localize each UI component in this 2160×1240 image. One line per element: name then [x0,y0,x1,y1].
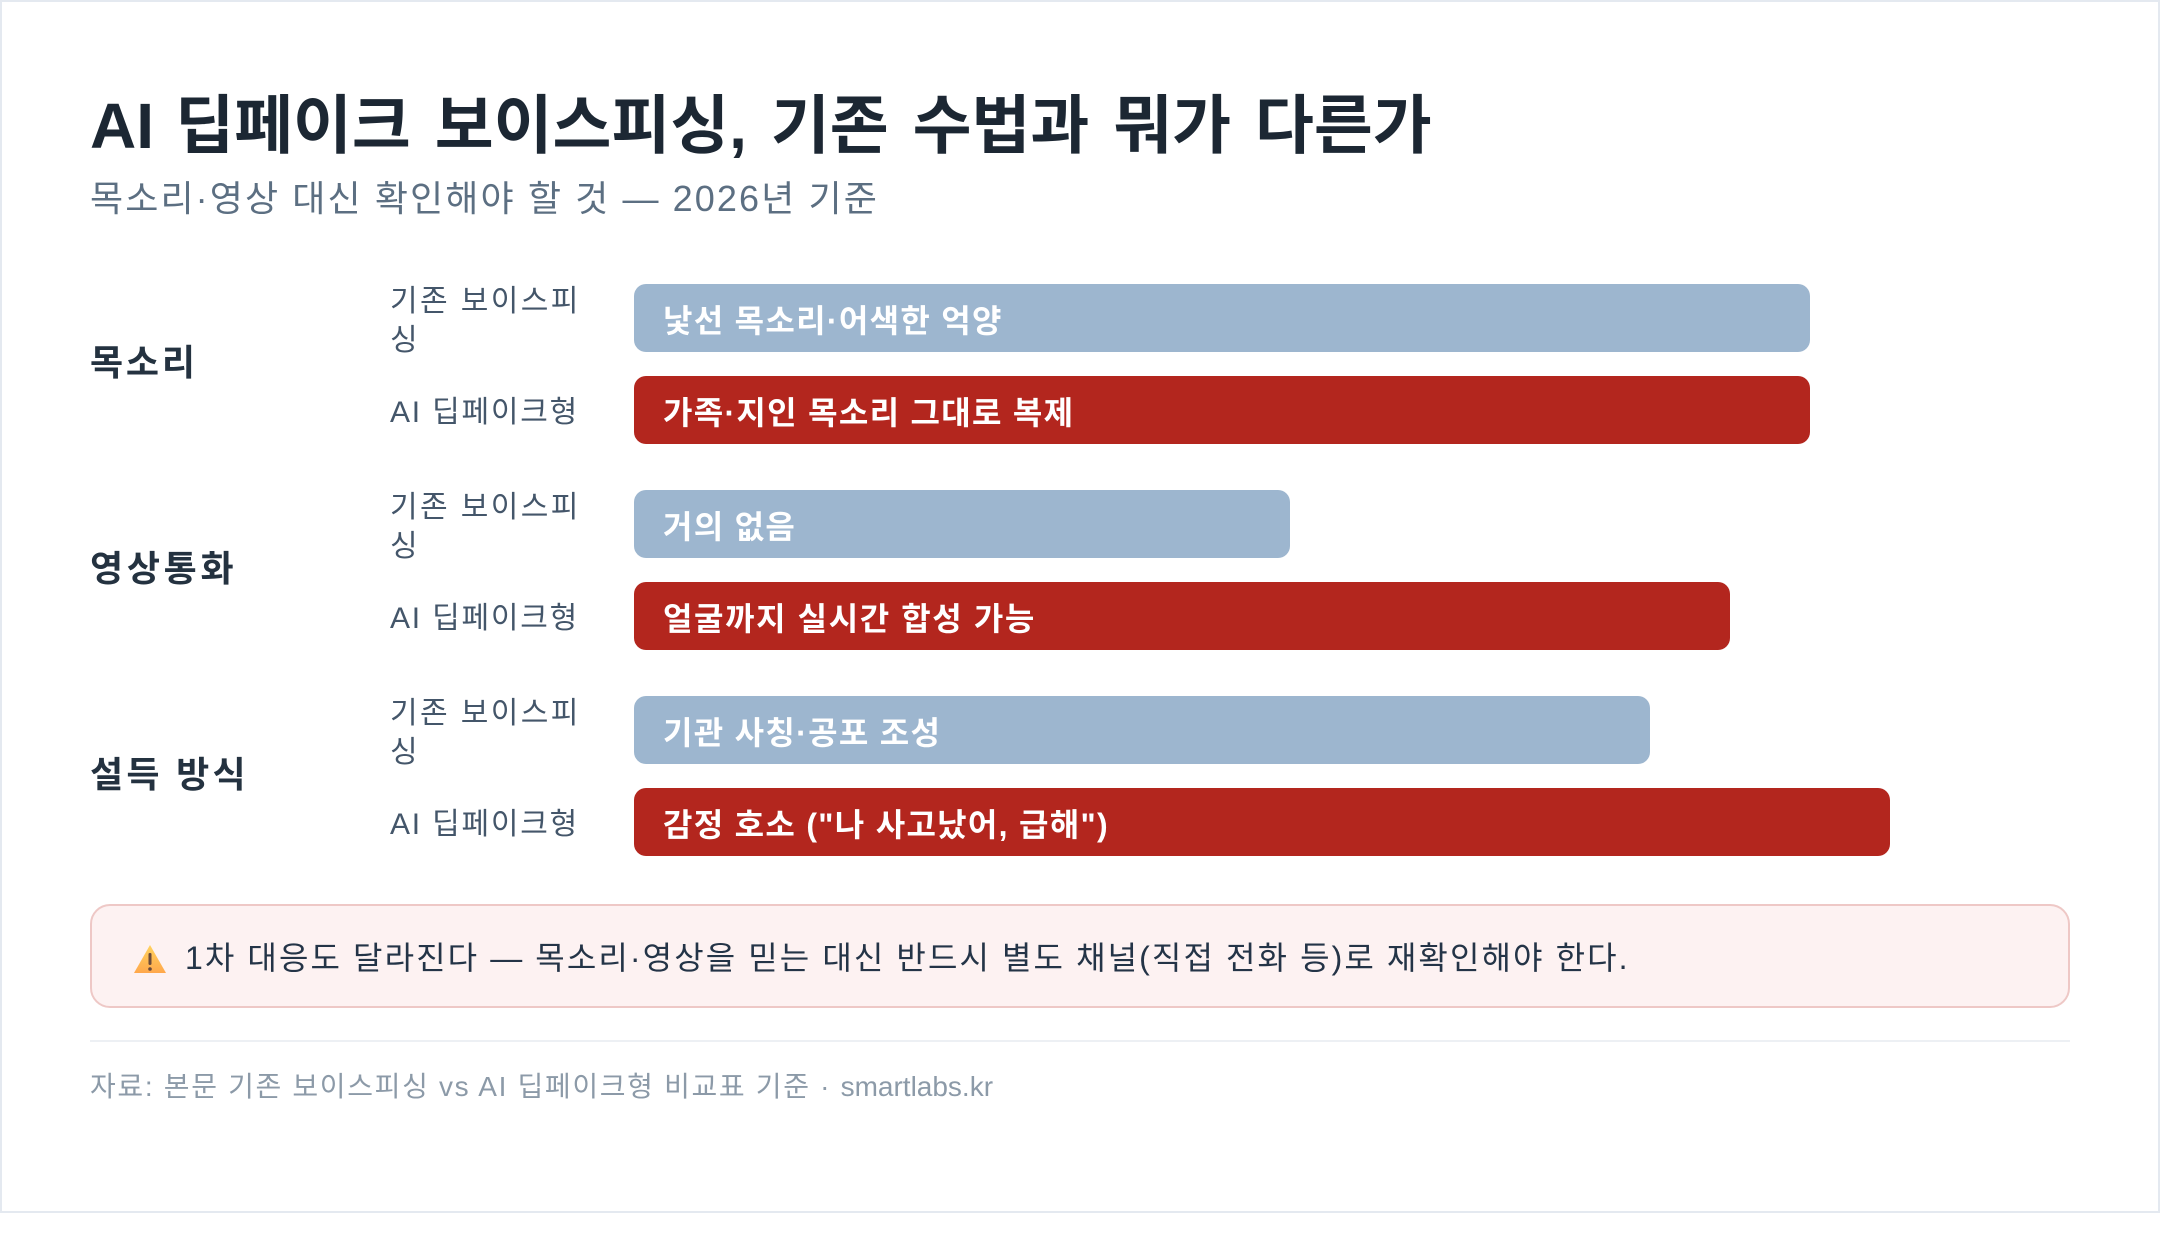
icon: warning [134,945,166,973]
callout [90,904,2070,1008]
callout text: 1차 대응도 달라진다 — 목소리·영상을 믿는 대신 반드시 별도 채널(직접 전화 등)로 재확인해야 한다. [185,940,1630,976]
bar: 기존 영상통화: 거의 없음 [663,509,796,545]
bar: 기존 설득 방식: 기관 사칭·공포 조성 [663,715,941,751]
category: 설득 방식: 설득 방식 [90,754,249,795]
row label: 기존 보이스피싱: 기존 보이스피싱 [390,491,581,563]
bar: 기존 목소리: 낯선 목소리·어색한 억양 [663,303,1003,339]
category: 영상통화: 영상통화 [90,548,237,589]
bar: 기존 영상통화 [634,490,1290,558]
subtitle: 목소리·영상 대신 확인해야 할 것 — 2026년 기준 [90,178,879,219]
bar: AI 영상통화 [634,582,1730,650]
footer source: 자료: 본문 기존 보이스피싱 vs AI 딥페이크형 비교표 기준 · smartlabs.kr [90,1071,993,1102]
title: AI 딥페이크 보이스피싱, 기존 수법과 뭐가 다른가 [90,90,1432,162]
bar: 기존 목소리 [634,284,1810,352]
row label: AI 딥페이크형: AI 딥페이크형 [390,396,579,429]
row label: AI 딥페이크형: AI 딥페이크형 [390,602,579,635]
bar: AI 설득 방식: 감정 호소 ("나 사고났어, 급해") [663,807,1109,843]
bar: AI 목소리: 가족·지인 목소리 그대로 복제 [663,395,1074,431]
row label: 기존 보이스피싱: 기존 보이스피싱 [390,285,581,357]
bar: AI 설득 방식 [634,788,1890,856]
footer divider [90,1040,2070,1042]
bar: 기존 설득 방식 [634,696,1650,764]
bar: AI 영상통화: 얼굴까지 실시간 합성 가능 [663,601,1036,637]
row label: 기존 보이스피싱: 기존 보이스피싱 [390,697,581,769]
bar: AI 목소리 [634,376,1810,444]
row label: AI 딥페이크형: AI 딥페이크형 [390,808,579,841]
category: 목소리: 목소리 [90,342,198,383]
